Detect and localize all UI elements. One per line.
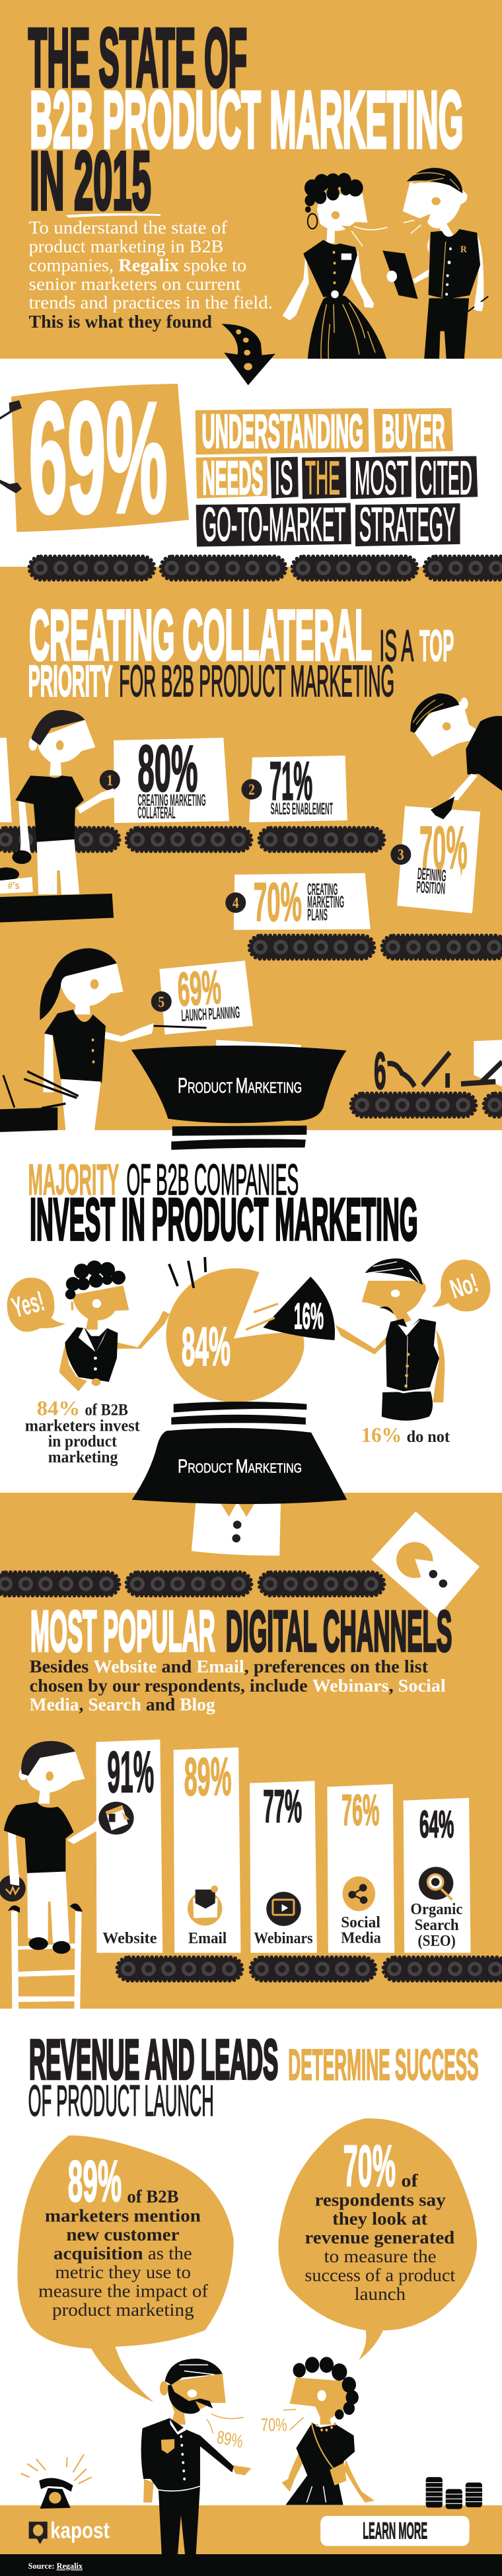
caption: 84% invest: marketers invest	[25, 1417, 140, 1435]
badge 3	[390, 844, 411, 865]
intro text: trends and practices in the field.	[29, 293, 273, 313]
caption: 16% do not: 16%	[361, 1423, 402, 1447]
bar: social media 76%: Media	[341, 1930, 381, 1947]
broken pieces on belt: 6	[374, 1042, 386, 1100]
badge 2: 2	[248, 781, 255, 798]
pie chart: 84% vs 16%	[166, 1257, 335, 1402]
stat card: 70% defining position	[397, 797, 480, 913]
caption: 16% do not: do not	[407, 1428, 450, 1446]
stat card: 80% creating marketing collateral	[114, 733, 229, 823]
intro text	[30, 1657, 446, 1715]
speech bubble: no: No!	[447, 1268, 482, 1305]
section background: creating collateral	[0, 567, 502, 1130]
intro text: Besides Website and Email, preferences on the list	[30, 1657, 429, 1677]
stat card: 69% launch planning: LAUNCH PLANNING	[181, 1003, 240, 1025]
section background: header	[0, 0, 502, 359]
speech bubble: 70%: launch	[355, 2284, 406, 2304]
pie chart: 84% vs 16%: 16%	[294, 1295, 324, 1337]
title	[28, 12, 463, 227]
illustration: woman saying yes	[59, 1260, 170, 1391]
heading	[28, 596, 454, 706]
badge 5: 5	[158, 993, 164, 1011]
intro text: senior marketers on current	[29, 274, 240, 294]
illustration: bearded man	[141, 2359, 251, 2555]
speech bubble: 89%: metric they use to	[55, 2262, 191, 2283]
bar: organic search 64%	[404, 1798, 471, 1953]
stat card: 80% creating marketing collateral: COLLATERAL	[137, 803, 176, 822]
stat card: 69% launch planning	[159, 960, 253, 1034]
stat card: 80% creating marketing collateral: CREATING MARKETING	[137, 791, 206, 810]
bar: webinars 77%: 77%	[263, 1780, 302, 1832]
bar: email 89%	[174, 1747, 240, 1953]
illustration: worker on ladder	[0, 1741, 103, 2009]
heading: OF PRODUCT LAUNCH	[28, 2077, 214, 2126]
speech bubble: 70%: success of a product	[305, 2265, 456, 2285]
intro text: To understand the state of	[29, 217, 228, 238]
badge 3: 3	[398, 846, 404, 863]
bar: organic search 64%: 64%	[419, 1803, 454, 1845]
stat card: 70% creating marketing plans: 70%	[254, 873, 302, 933]
heading: MOST POPULAR	[30, 1598, 215, 1663]
pie chart: 84% vs 16%: 84%	[182, 1316, 231, 1377]
digital channels panel	[0, 1598, 471, 2009]
caption: 84% invest: 84%	[37, 1397, 80, 1419]
speech bubble: 70%: they look at	[332, 2209, 427, 2229]
headline strips: understanding buyer needs: THE	[305, 452, 340, 505]
intro text: chosen by our respondents, include Webinars, Social	[30, 1676, 446, 1696]
stat card: 69%	[0, 369, 189, 546]
stat card: 70% creating marketing plans: PLANS	[307, 906, 328, 924]
badge 2	[241, 779, 262, 799]
bar: organic search 64%: Search	[415, 1917, 459, 1934]
logo: kapost	[29, 2518, 110, 2544]
bar: webinars 77%	[250, 1780, 317, 1953]
heading	[28, 2028, 479, 2126]
intro text	[29, 217, 273, 332]
caption: 84% invest: in product	[48, 1433, 118, 1450]
caption: 84% invest: of B2B	[85, 1402, 128, 1419]
heading: MAJORITY	[28, 1155, 119, 1203]
bar: website 91%	[96, 1738, 162, 1953]
stat card: 69%: 69%	[29, 369, 167, 546]
badge 4	[225, 892, 246, 913]
headline strips: understanding buyer needs	[196, 406, 478, 551]
speech bubble: 89%: of B2B	[127, 2186, 178, 2207]
broken pieces on belt	[374, 1040, 502, 1100]
speech bubble: 89%: acquisition as the	[54, 2243, 192, 2264]
product launch panel	[17, 2028, 482, 2571]
title: IN 2015	[30, 135, 151, 227]
heading	[28, 1155, 418, 1253]
flying card with pie icon	[371, 1511, 480, 1618]
speech bubble: 89%: product marketing	[52, 2300, 194, 2320]
invest panel	[7, 1155, 491, 1618]
stat card: 70% defining position: POSITION	[416, 877, 446, 898]
intro text: companies, Regalix spoke to	[29, 255, 246, 275]
headline strips: understanding buyer needs: NEEDS	[202, 452, 263, 505]
speech bubble: 70%: to measure the	[324, 2246, 437, 2266]
caption: 84% invest	[25, 1397, 140, 1466]
illustration: worker with card 1	[0, 710, 114, 922]
digital channels panel: 91%	[107, 1738, 154, 1805]
badge 1: 1	[106, 772, 113, 789]
stat card: 70% creating marketing plans	[234, 873, 371, 933]
illustration: worker with paintbrush	[410, 694, 502, 801]
stat card: 70% creating marketing plans: MARKETING	[307, 892, 344, 911]
header panel	[0, 12, 488, 551]
illustration: man with tablet	[382, 168, 488, 359]
intro text: product marketing in B2B	[29, 236, 223, 256]
creating collateral panel: TOP	[419, 622, 454, 671]
creating collateral panel	[0, 596, 502, 1150]
speech bubble: yes: Yes!	[9, 1285, 48, 1324]
stat card: 71% sales enablement: 71%	[269, 751, 312, 811]
conveyor belts	[0, 556, 502, 1980]
speech bubble: 89%: marketers mention	[45, 2205, 201, 2226]
speech bubble: no	[431, 1260, 491, 1312]
stat card: 71% sales enablement: SALES ENABLEMENT	[271, 799, 333, 818]
speech bubble: 70%: 70%	[343, 2133, 396, 2198]
footer bar	[0, 2554, 502, 2576]
illustration: woman with name badge	[283, 173, 387, 359]
illustration: worker with card 1: #'s	[8, 880, 20, 892]
illustration: man with tablet: R	[460, 244, 467, 255]
bar: social media 76%	[327, 1784, 394, 1953]
product marketing bowl inverted	[132, 1402, 347, 1556]
bar: website 91%: Website	[102, 1930, 157, 1947]
headline strips: understanding buyer needs: IS	[275, 452, 293, 505]
stat card: 70% defining position: DEFINING	[417, 864, 447, 885]
bar: organic search 64%: (SEO)	[418, 1933, 456, 1950]
speech bubble: 70%: revenue generated	[305, 2227, 455, 2248]
bar: webinars 77%: Webinars	[254, 1930, 313, 1947]
stat card: 80% creating marketing collateral: 80%	[137, 733, 198, 805]
heading: IS A	[379, 622, 413, 671]
illustration: woman with bag: 70%	[261, 2415, 287, 2435]
section background: digital channels	[0, 1493, 502, 2009]
caption: 84% invest: marketing	[48, 1449, 118, 1466]
source line: Source: Regalix	[28, 2561, 83, 2571]
logo: kapost: kapost	[50, 2518, 110, 2543]
bar: social media 76%: Social	[341, 1914, 380, 1931]
speech bubble: 70%: of	[401, 2170, 418, 2191]
headline strips: understanding buyer needs: MOST	[355, 452, 408, 505]
speech bubble: 89%: 89%	[68, 2149, 122, 2213]
bar: email 89%: Email	[188, 1930, 227, 1947]
illustration: bearded man: 89%	[215, 2427, 244, 2452]
badge 1	[77, 770, 120, 814]
caption: 16% do not	[361, 1423, 450, 1447]
speech bubble: 89%: new customer	[66, 2225, 179, 2244]
section background: product launch base	[0, 2505, 502, 2555]
illustration: man saying no	[335, 1258, 445, 1421]
icon: ringing telephone	[21, 2454, 92, 2509]
product marketing bowl: PRODUCT MARKETING	[178, 1075, 302, 1098]
speech bubble: 70%: respondents say	[314, 2190, 446, 2210]
badge 5	[151, 991, 172, 1012]
speech bubble: 70%	[278, 2118, 477, 2360]
stat card: 71% sales enablement	[249, 751, 347, 822]
speech bubble: 89%: measure the impact of	[38, 2281, 208, 2301]
illustration: worker with chopsticks	[0, 948, 207, 1132]
product marketing bowl	[131, 1040, 346, 1150]
stat card: 70% creating marketing plans: CREATING	[307, 880, 338, 899]
bar: organic search 64%: Organic	[410, 1901, 463, 1918]
intro text: Media, Search and Blog	[30, 1695, 215, 1715]
bar: social media 76%: 76%	[341, 1786, 379, 1834]
illustration: woman with bag	[261, 2357, 375, 2505]
product marketing bowl inverted: PRODUCT MARKETING	[178, 1456, 302, 1477]
button: learn more: LEARN MORE	[363, 2519, 427, 2544]
badge 4: 4	[233, 894, 239, 912]
heading: PRIORITY	[28, 657, 113, 706]
arrow	[221, 324, 275, 385]
bar: email 89%: 89%	[184, 1748, 231, 1807]
button: learn more	[320, 2516, 470, 2546]
intro text: This is what they found	[29, 312, 212, 332]
stat card: 69% launch planning: 69%	[176, 961, 223, 1017]
speech bubble: 89%	[17, 2135, 234, 2402]
icon: website	[98, 1802, 134, 1835]
icon: coin stacks	[426, 2477, 482, 2509]
